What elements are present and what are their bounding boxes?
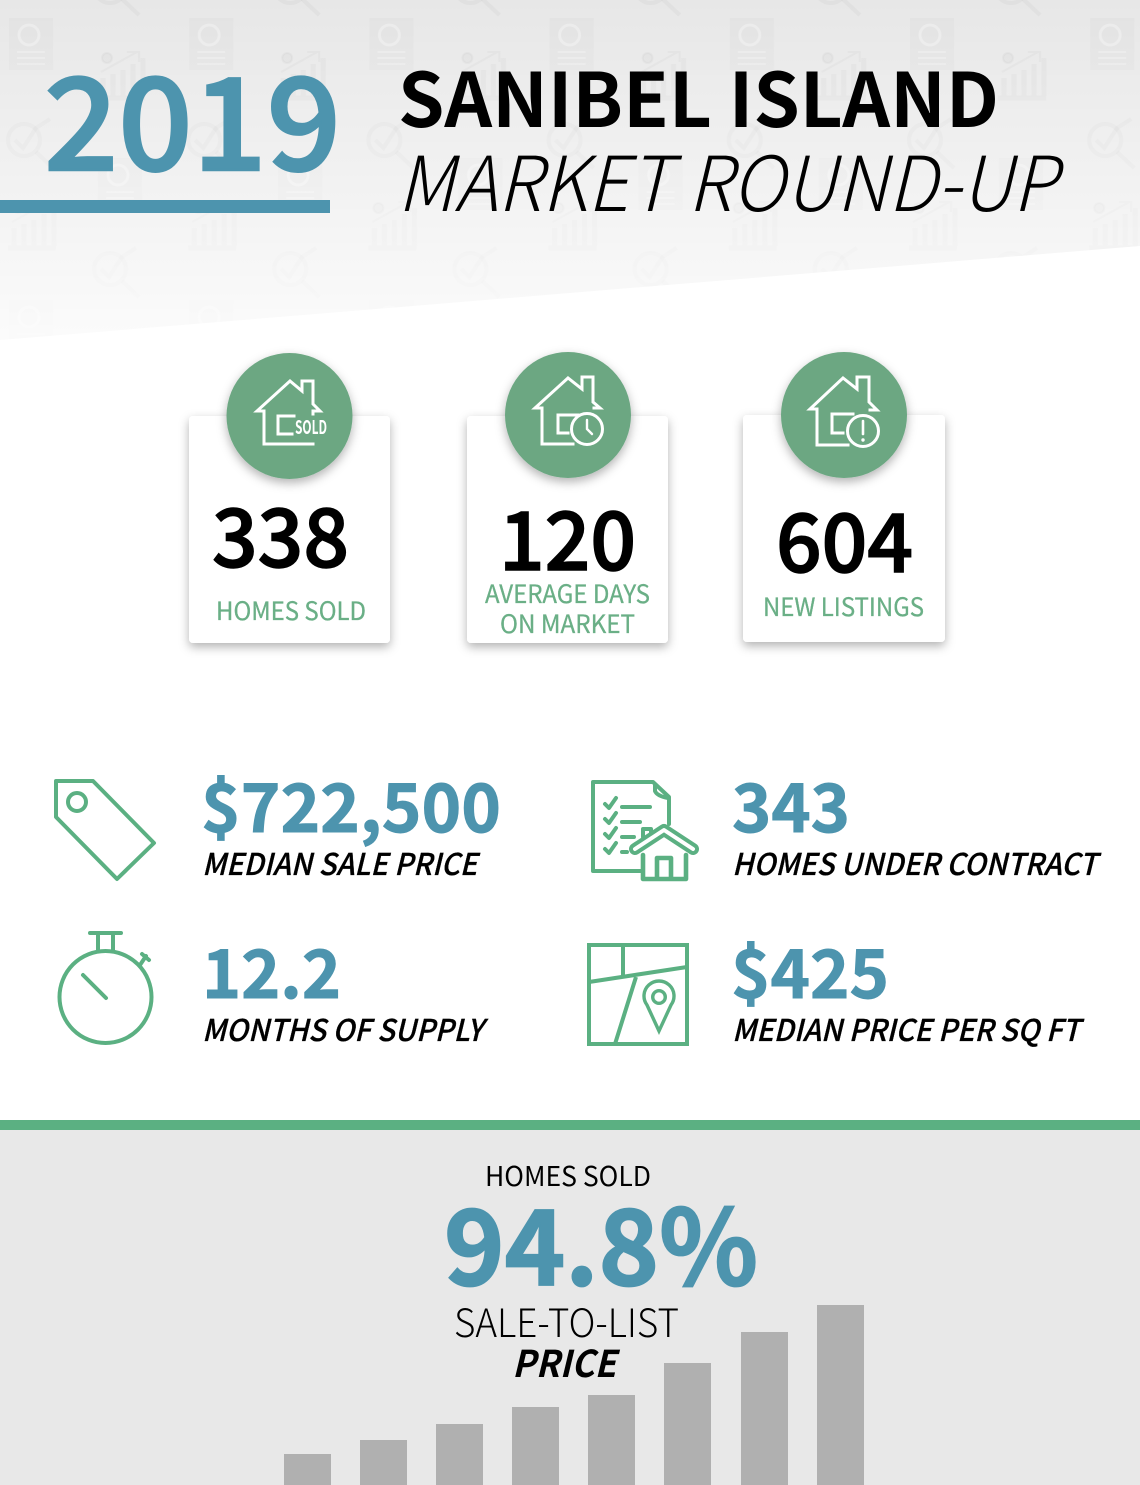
- label: average days on market: [485, 575, 650, 641]
- panel: homes sold card: [189, 353, 390, 643]
- value: $425: [731, 921, 889, 1018]
- icon: house with clock: [505, 352, 631, 478]
- label: new listings: NEW LISTINGS: [763, 588, 924, 624]
- icon: sold house: [226, 353, 352, 479]
- label: homes sold: HOMES SOLD: [485, 1155, 651, 1194]
- caption: MONTHS OF SUPPLY: [202, 1006, 489, 1050]
- label: average days on market: AVERAGE DAYS: [485, 575, 650, 611]
- title: MARKET ROUND-UP: [397, 123, 1066, 233]
- header background: [0, 0, 1140, 346]
- icon: map with pin: [589, 945, 687, 1044]
- stat: median price per square foot: [589, 921, 1085, 1050]
- value: $722,500: [201, 755, 501, 852]
- stat: median sale price: [56, 755, 501, 884]
- icon: stopwatch: [60, 933, 152, 1043]
- label: homes sold: HOMES SOLD: [216, 592, 366, 628]
- stat: months of supply: [60, 921, 489, 1050]
- number: 604: 604: [776, 479, 913, 596]
- number: 338: 338: [212, 474, 349, 591]
- label: price: PRICE: [512, 1334, 621, 1388]
- icon: sold house: SOLD: [295, 413, 327, 440]
- stat: homes under contract: [593, 755, 1102, 884]
- caption: HOMES UNDER CONTRACT: [732, 840, 1102, 884]
- icon: checklist with house: [593, 782, 693, 879]
- icon: price tag: [56, 781, 154, 879]
- year heading: 2019: [44, 22, 341, 207]
- number: 120: 120: [499, 477, 636, 594]
- panel: new listings card: [743, 352, 945, 642]
- label: average days on market: ON MARKET: [500, 605, 635, 641]
- title: SANIBEL ISLAND: [398, 40, 999, 149]
- panel: average days on market card: [467, 352, 668, 643]
- value: 343: [732, 755, 850, 852]
- panel: sale-to-list section: [0, 1120, 1140, 1485]
- title: [397, 40, 1066, 233]
- caption: MEDIAN PRICE PER SQ FT: [732, 1006, 1085, 1050]
- caption: MEDIAN SALE PRICE: [202, 840, 481, 884]
- value: 12.2: [202, 921, 341, 1018]
- icon: house with alert: [781, 352, 907, 478]
- value: 94.8%: 94.8%: [444, 1164, 758, 1315]
- bar chart: [284, 1305, 864, 1485]
- label: sale-to-list: SALE-TO-LIST: [454, 1293, 679, 1349]
